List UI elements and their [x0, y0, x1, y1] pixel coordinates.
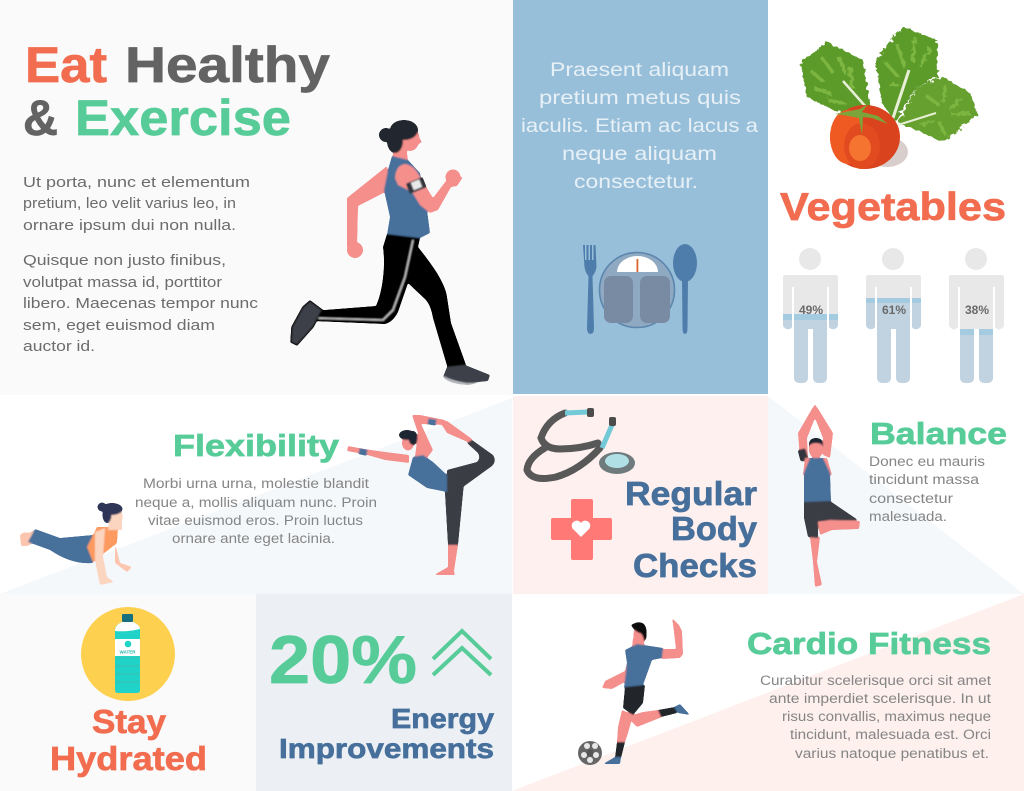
title: Exercise [75, 90, 291, 146]
icon: soccer player with ball [578, 618, 690, 765]
heading: vegetables: Vegetables [780, 186, 1006, 229]
panel: blue quote background [513, 0, 768, 394]
icon: stethoscope [527, 408, 635, 478]
heading: regular body checks: Regular [625, 475, 757, 512]
icon: lettuce and tomato [800, 27, 978, 169]
label: energy improvements: Improvements [279, 733, 494, 764]
cardio text: varius natoque penatibus et. [795, 746, 989, 761]
panel: flexibility background [0, 396, 513, 594]
heading: regular body checks: Checks [633, 547, 757, 584]
intro text block: pretium, leo velit varius leo, in [23, 195, 236, 212]
chart: body figure 61%: 61% [882, 303, 906, 317]
quote text: Praesent aliquam [550, 59, 729, 81]
heading: balance: Balance [870, 416, 1007, 451]
intro text block: Ut porta, nunc et elementum [23, 174, 250, 191]
icon: runner [291, 120, 490, 385]
heading: cardio fitness: Cardio Fitness [747, 626, 991, 661]
stat: 20 percent: 20% [269, 622, 417, 698]
balance text: Donec eu mauris [869, 454, 985, 469]
balance text: tincidunt massa [869, 472, 980, 487]
icon: dancer pose woman [347, 415, 495, 575]
cardio text [760, 673, 991, 761]
balance text: malesuada. [869, 509, 947, 524]
heading: stay hydrated: Stay [92, 703, 167, 740]
flexibility text [135, 476, 377, 546]
heading: regular body checks [625, 475, 758, 584]
title: Eat [25, 37, 107, 93]
quote text: neque aliquam [562, 143, 717, 165]
balance text [869, 454, 985, 524]
icon: plate with scale, fork and spoon [583, 244, 697, 334]
chart: body figure 49% [783, 248, 838, 383]
cardio text: tincidunt, malesuada est. Orci [790, 727, 991, 742]
quote text: pretium metus quis [539, 87, 741, 109]
icon: medical cross with heart [551, 499, 612, 560]
title: & [23, 90, 58, 146]
panel: intro background [0, 0, 513, 395]
flexibility text: ornare ante eget lacinia. [172, 531, 335, 546]
icon: plank woman [20, 502, 132, 585]
heading: stay hydrated [50, 703, 207, 777]
flexibility text: neque a, mollis aliquam nunc. Proin [135, 495, 377, 510]
chart: body figure 49%: 49% [799, 303, 823, 317]
chart: body figure 38%: 38% [965, 303, 989, 317]
cardio text: Curabitur scelerisque orci sit amet [760, 673, 991, 688]
intro text block: volutpat massa id, porttitor [23, 274, 222, 291]
chart: body figure 61% [866, 248, 921, 383]
panel: hydration background [0, 594, 256, 791]
intro text block: Quisque non justo finibus, [23, 252, 226, 269]
flexibility text: Morbi urna urna, molestie blandit [143, 476, 369, 491]
chart: body figure 38% [949, 248, 1004, 383]
cardio text: risus convallis, maximus neque [782, 709, 991, 724]
heading: regular body checks: Body [671, 510, 758, 547]
title: Healthy [125, 37, 330, 93]
balance text: consectetur [869, 491, 954, 506]
flexibility text: vitae euismod eros. Proin luctus [148, 513, 363, 528]
title [23, 37, 330, 146]
heading: stay hydrated: Hydrated [50, 740, 207, 777]
icon: water bottle in yellow circle [81, 607, 175, 701]
panel: regular body checks background [513, 396, 768, 594]
label: energy improvements [279, 703, 494, 764]
icon: tree pose man [798, 404, 860, 587]
panel: balance background [768, 396, 1024, 594]
icon: double chevron up [433, 631, 491, 675]
quote text: iaculis. Etiam ac lacus a [521, 115, 758, 137]
cardio text: ante imperdiet scelerisque. In ut [769, 691, 991, 706]
heading: flexibility: Flexibility [173, 428, 340, 463]
intro text block [23, 174, 259, 355]
quote text: consectetur. [574, 171, 698, 193]
panel: cardio background [512, 594, 1024, 791]
icon: water bottle in yellow circle: WATER [120, 650, 136, 654]
intro text block: ornare ipsum dui non nulla. [23, 217, 236, 234]
quote text [521, 59, 758, 193]
intro text block: libero. Maecenas tempor nunc [23, 295, 259, 312]
intro text block: auctor id. [23, 338, 95, 355]
panel: energy background [256, 594, 512, 791]
intro text block: sem, eget euismod diam [23, 317, 215, 334]
label: energy improvements: Energy [391, 703, 494, 734]
